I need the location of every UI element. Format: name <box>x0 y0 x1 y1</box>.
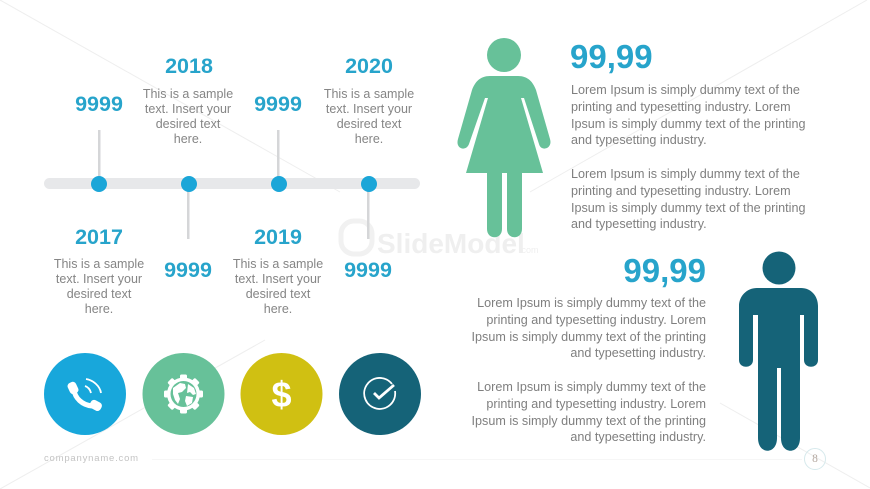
year 2020: 2020 <box>345 54 393 78</box>
stem 2020 <box>367 190 370 239</box>
page number badge: 8 <box>812 453 818 465</box>
text: man paragraph 2 <box>472 380 706 444</box>
stat: man value: 99,99 <box>623 252 706 289</box>
text: woman paragraph 2: printing and typesetting industry. Lorem <box>571 184 791 198</box>
caption 2019: desired text <box>246 287 310 301</box>
icon: dollar: $ <box>271 374 292 415</box>
caption 2019 <box>233 257 323 316</box>
caption 2019: here. <box>264 302 292 316</box>
icon: check circle <box>339 353 421 435</box>
stat: woman value: 99,99 <box>570 38 653 75</box>
value 9999 above 2017: 9999 <box>75 92 123 116</box>
caption 2019: text. Insert your <box>235 272 321 286</box>
text: woman paragraph 2: and typesetting industry. <box>571 217 707 231</box>
text: man paragraph 2: printing and typesetting industry. Lorem <box>486 397 706 411</box>
icon: dollar <box>240 353 322 435</box>
value 9999 below 2018: 9999 <box>164 258 212 282</box>
text: man paragraph 2: Ipsum is simply dummy text of the printing <box>472 414 706 428</box>
stem 2017 <box>98 130 100 180</box>
text: woman paragraph 2: Lorem Ipsum is simply dummy text of the <box>571 167 800 181</box>
icon: phone <box>44 353 126 435</box>
value 9999 above 2019: 9999 <box>254 92 302 116</box>
text: woman paragraph 1: Lorem Ipsum is simply dummy text of the <box>571 83 800 97</box>
value 9999 below 2020: 9999 <box>344 258 392 282</box>
background decorative lines and watermark: .com <box>519 245 539 255</box>
timeline bar <box>44 178 420 189</box>
icon: gear globe <box>142 353 224 435</box>
year 2018: 2018 <box>165 54 213 78</box>
caption 2020: text. Insert your <box>326 102 412 116</box>
caption 2020 <box>324 87 414 146</box>
caption 2020: desired text <box>337 117 401 131</box>
text: woman paragraph 1: printing and typesetting industry. Lorem <box>571 100 791 114</box>
caption 2019: This is a sample <box>233 257 323 271</box>
text: man paragraph 1: printing and typesetting industry. Lorem <box>486 313 706 327</box>
marker 2019 <box>271 176 287 192</box>
marker 2018 <box>181 176 197 192</box>
stem 2019 <box>277 130 280 180</box>
caption 2018 <box>143 87 233 146</box>
caption 2017: This is a sample <box>54 257 144 271</box>
caption 2018: text. Insert your <box>145 102 231 116</box>
text: woman paragraph 1: Ipsum is simply dummy text of the printing <box>571 117 805 131</box>
text: man paragraph 1 <box>472 296 706 360</box>
background decorative lines and watermark: SlideModel <box>377 228 525 259</box>
page number badge <box>804 448 826 470</box>
text: woman paragraph 1 <box>571 83 805 147</box>
caption 2020: here. <box>355 132 383 146</box>
text: man paragraph 1: Lorem Ipsum is simply dummy text of the <box>477 296 706 310</box>
caption 2018: desired text <box>156 117 220 131</box>
caption 2018: here. <box>174 132 202 146</box>
text: woman paragraph 2: Ipsum is simply dummy text of the printing <box>571 201 805 215</box>
caption 2017: desired text <box>67 287 131 301</box>
stem 2018 <box>187 190 190 239</box>
year 2019: 2019 <box>254 225 302 249</box>
text: man paragraph 1: Ipsum is simply dummy text of the printing <box>472 330 706 344</box>
marker 2020 <box>361 176 377 192</box>
caption 2017: here. <box>85 302 113 316</box>
text: man paragraph 2: Lorem Ipsum is simply dummy text of the <box>477 380 706 394</box>
year 2017: 2017 <box>75 225 123 249</box>
caption 2018: This is a sample <box>143 87 233 101</box>
text: woman paragraph 2 <box>571 167 805 231</box>
caption 2017: text. Insert your <box>56 272 142 286</box>
caption 2017 <box>54 257 144 316</box>
footer website: companyname.com <box>44 453 139 464</box>
text: woman paragraph 1: and typesetting industry. <box>571 133 707 147</box>
marker 2017 <box>91 176 107 192</box>
caption 2020: This is a sample <box>324 87 414 101</box>
text: man paragraph 1: and typesetting industry. <box>570 346 706 360</box>
text: man paragraph 2: and typesetting industry. <box>570 430 706 444</box>
